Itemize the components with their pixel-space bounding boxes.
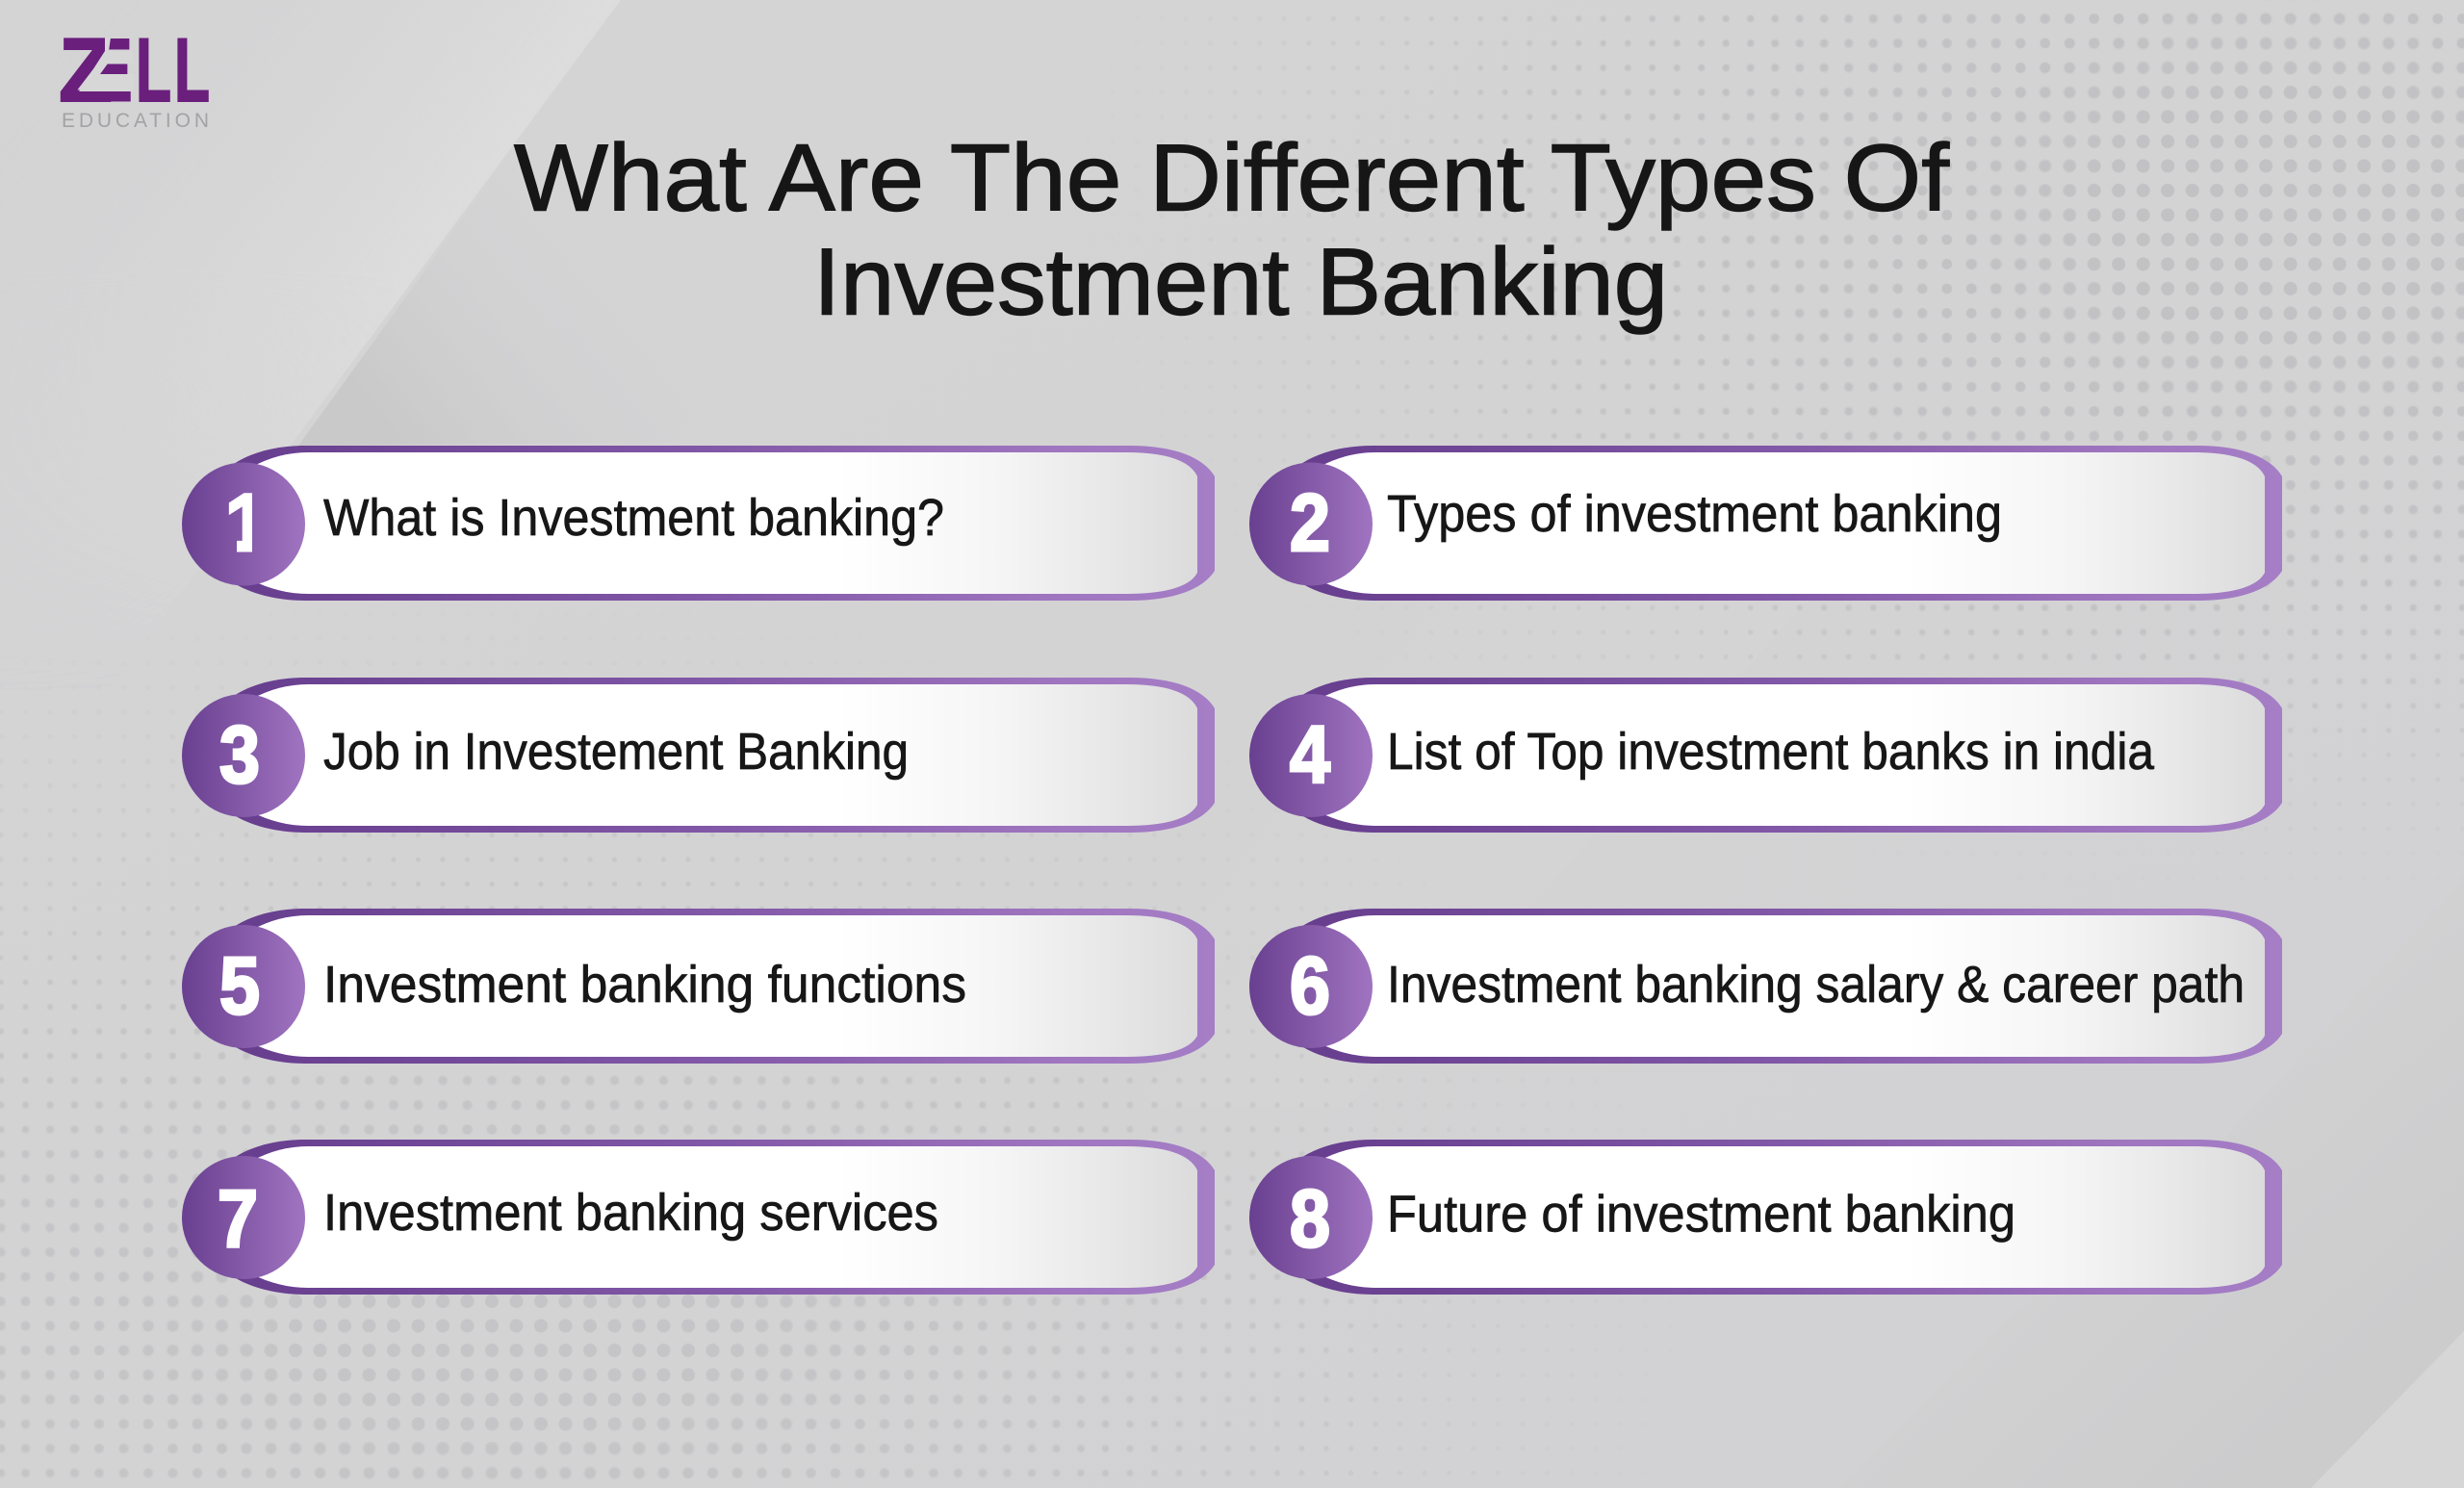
logo: Zell Education: EDUCATION [62,110,209,132]
item 3: Job in Investement Banking: Job in Investement Banking [323,723,909,781]
item 8: Future of investment banking: 8 [1290,1173,1330,1264]
item 2: Types of investment banking: 2 [1290,477,1330,568]
item 1: What is Investment banking?: 1 [225,477,270,568]
item 3: Job in Investement Banking [182,678,1215,833]
title [514,125,1950,335]
logo: Zell Education: Z [59,19,113,120]
dot pattern: bottom left [0,808,1401,1478]
logo: Zell Education: L [136,19,171,120]
background [298,0,620,446]
item 6: Investment banking salary & career path: Investment banking salary & career path [1387,956,2245,1013]
logo: Zell Education: L [174,19,210,120]
item 1: What is Investment banking? [182,446,1215,601]
item 7: Investment banking services [182,1140,1215,1295]
item 1: What is Investment banking?: What is Investment banking? [323,489,944,547]
item 5: Investment banking functions: 5 [219,940,260,1031]
item 6: Investment banking salary & career path: 6 [1290,940,1330,1031]
item 8: Future of investment banking [1249,1140,2282,1295]
item 4: List of Top investment banks in india [1249,678,2282,833]
logo: Zell Education [59,19,210,132]
item 7: Investment banking services: Investment banking services [323,1184,938,1242]
item 5: Investment banking functions [182,909,1215,1064]
title: What Are The Different Types Of [514,125,1950,231]
item 7: Investment banking services: 7 [218,1173,258,1264]
item 3: Job in Investement Banking: 3 [219,709,260,800]
item 2: Types of investment banking: Types of investment banking [1387,485,2002,543]
logo: Zell Education: E [90,19,133,120]
item 5: Investment banking functions: Investment banking functions [323,956,966,1013]
item 2: Types of investment banking [1249,446,2282,601]
item 6: Investment banking salary & career path [1249,909,2282,1064]
item 8: Future of investment banking: Future of investment banking [1387,1186,2015,1244]
item 4: List of Top investment banks in india: List of Top investment banks in india [1387,723,2155,781]
dot pattern: top right [1309,13,2464,757]
item 4: List of Top investment banks in india: 4 [1290,709,1330,800]
title: Investment Banking [813,229,1668,335]
